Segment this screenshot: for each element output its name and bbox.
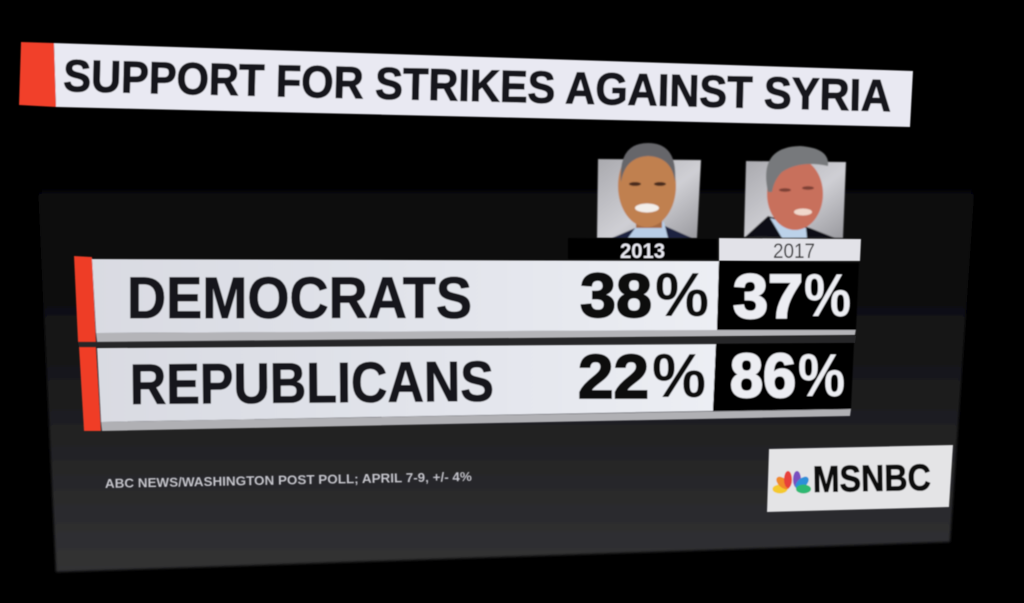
republicans 2017 value: 86 — [730, 342, 796, 411]
republicans shadow strip — [101, 409, 851, 431]
logo plate — [767, 445, 953, 512]
democrats 2017 value: 37 — [733, 263, 803, 332]
title text: SUPPORT FOR STRIKES AGAINST SYRIA — [63, 50, 892, 121]
photo: 2017 portrait — [744, 146, 846, 238]
democrats red accent — [74, 256, 96, 342]
year label 2017: 2017 — [773, 240, 815, 263]
suit — [745, 216, 835, 238]
republicans label: REPUBLICANS — [130, 350, 494, 417]
neck — [636, 212, 662, 228]
face — [618, 145, 676, 227]
republicans 2017 cell — [713, 343, 854, 411]
year label 2013 — [568, 238, 717, 263]
democrats 2017 cell — [717, 261, 859, 330]
republicans red accent — [79, 347, 101, 431]
title banner — [19, 42, 913, 127]
democrats label: DEMOCRATS — [127, 266, 472, 331]
year label 2013: 2013 — [620, 240, 665, 263]
row: Democrats — [74, 256, 859, 342]
democrats 2013 value: % — [655, 261, 709, 330]
republicans 2013 value: % — [652, 342, 706, 411]
republicans 2013 value: 22 — [578, 343, 649, 412]
photo: 2013 portrait — [597, 143, 701, 238]
title white bar — [54, 43, 913, 127]
divider between rows — [78, 336, 856, 347]
source note: ABC NEWS/WASHINGTON POST POLL; APRIL 7-9, +/- 4% — [105, 469, 472, 491]
row: Republicans — [79, 342, 854, 431]
republicans 2017 value — [730, 342, 845, 411]
face — [767, 158, 823, 230]
democrats 2013 value — [580, 261, 709, 331]
democrats 2017 value: % — [804, 262, 851, 329]
democrats white bar — [92, 259, 719, 333]
MSNBC logo — [767, 445, 953, 512]
republicans 2017 value: % — [798, 342, 845, 409]
year label 2017 — [719, 238, 861, 263]
title red accent — [19, 42, 56, 107]
logo wordmark: MSNBC — [812, 457, 931, 500]
democrats 2013 value: 38 — [580, 262, 652, 331]
icon: peacock — [772, 471, 811, 494]
suit — [612, 226, 692, 238]
democrats shadow strip — [96, 329, 856, 342]
republicans 2013 value — [578, 342, 706, 412]
democrats 2017 value — [733, 262, 851, 332]
republicans white bar — [97, 344, 716, 422]
